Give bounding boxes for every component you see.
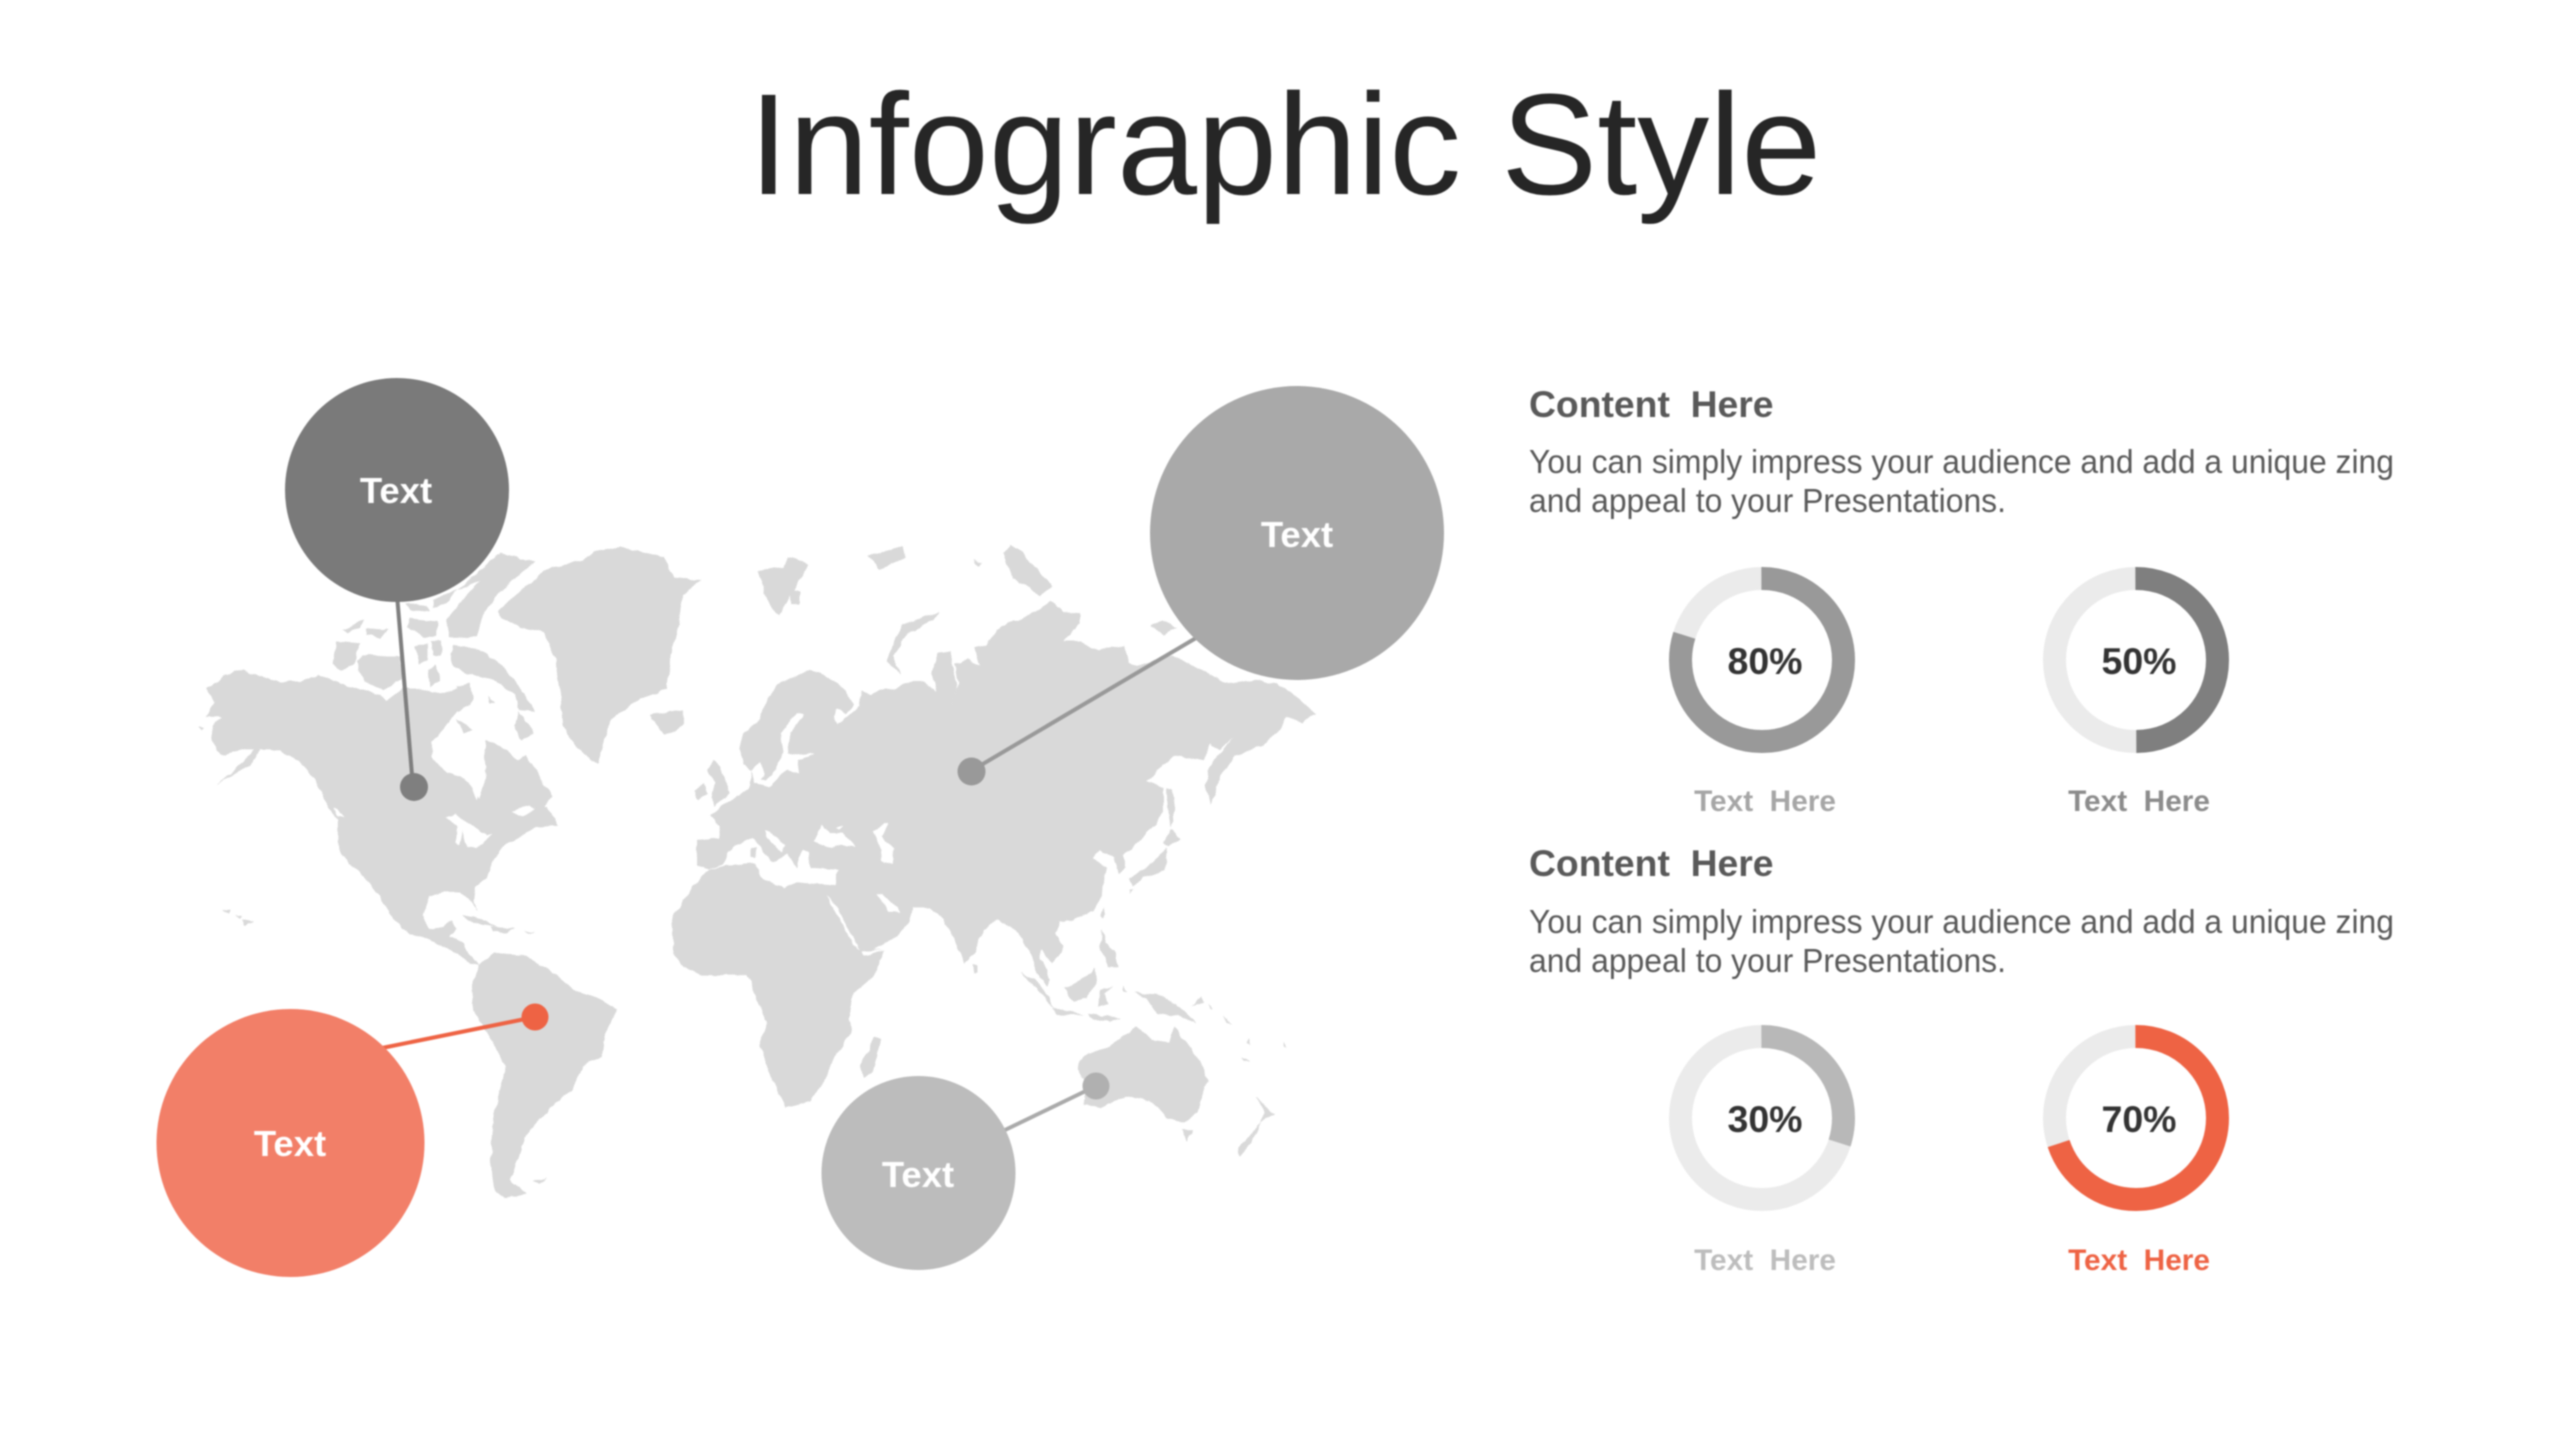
- location dot: [958, 758, 986, 786]
- title: Infographic Style: [749, 64, 1821, 225]
- map: Great Lakes and coastal inlets: [313, 788, 535, 918]
- donut 30%: 30%: [1727, 1098, 1803, 1140]
- donut 50%: 50%: [2101, 640, 2177, 682]
- donut 70%: 70%: [2101, 1098, 2177, 1140]
- body text line 2: and appeal to your Presentations.: [1529, 482, 2006, 519]
- heading: Content Here: [1529, 383, 1774, 425]
- map: Africa south: [751, 969, 875, 1107]
- callout: North America: [285, 378, 509, 801]
- bubble: [285, 378, 509, 602]
- leader line: [397, 595, 413, 787]
- donut 50%: [2054, 578, 2218, 742]
- donut label 50%: Text Here: [2068, 785, 2210, 818]
- map: Mediterranean and inland seas: [708, 713, 900, 956]
- panel: content section 1: [1529, 383, 2394, 818]
- location dot: [522, 1004, 548, 1030]
- bubble: [822, 1076, 1016, 1270]
- callout: Australia: [822, 1072, 1110, 1270]
- leader line: [382, 1017, 535, 1048]
- callout: South America: [156, 1004, 548, 1277]
- bubble label: Text: [254, 1123, 326, 1164]
- body text: You can simply impress your audience and add a unique zing: [1529, 903, 2394, 940]
- body text: You can simply impress your audience and add a unique zing: [1529, 443, 2394, 480]
- bubble label: Text: [1261, 514, 1333, 555]
- leader line: [1005, 1086, 1096, 1130]
- donut 80%: [1680, 578, 1844, 742]
- leader line: [971, 638, 1196, 771]
- map: Canada, Hudson Bay and Arctic islands: [333, 553, 537, 800]
- callout: Russia: [958, 386, 1444, 786]
- donut 80%: 80%: [1727, 640, 1803, 682]
- donut label 80%: Text Here: [1694, 785, 1836, 818]
- bubble: [1150, 386, 1444, 680]
- map: western Eurasia and north Africa: [650, 620, 1040, 1020]
- bubble label: Text: [882, 1154, 954, 1195]
- location dot: [400, 773, 428, 801]
- donut 30%: [1680, 1036, 1844, 1200]
- bubble: [156, 1009, 424, 1277]
- panel: content section 2: [1529, 842, 2394, 1277]
- body text line 2: and appeal to your Presentations.: [1529, 942, 2006, 979]
- donut 70%: [2054, 1036, 2218, 1200]
- world map: [198, 545, 1315, 1198]
- donut label 70%: Text Here: [2068, 1244, 2210, 1277]
- bubble label: Text: [360, 470, 432, 511]
- map: Americas and Greenland: [198, 547, 701, 1198]
- donut label 30%: Text Here: [1694, 1244, 1836, 1277]
- heading: Content Here: [1529, 842, 1774, 884]
- location dot: [1082, 1072, 1110, 1100]
- map: polar islands, Madagascar, Australia and New Zealand: [758, 545, 1275, 1156]
- map: eastern Asia and Indonesia: [1000, 602, 1315, 1062]
